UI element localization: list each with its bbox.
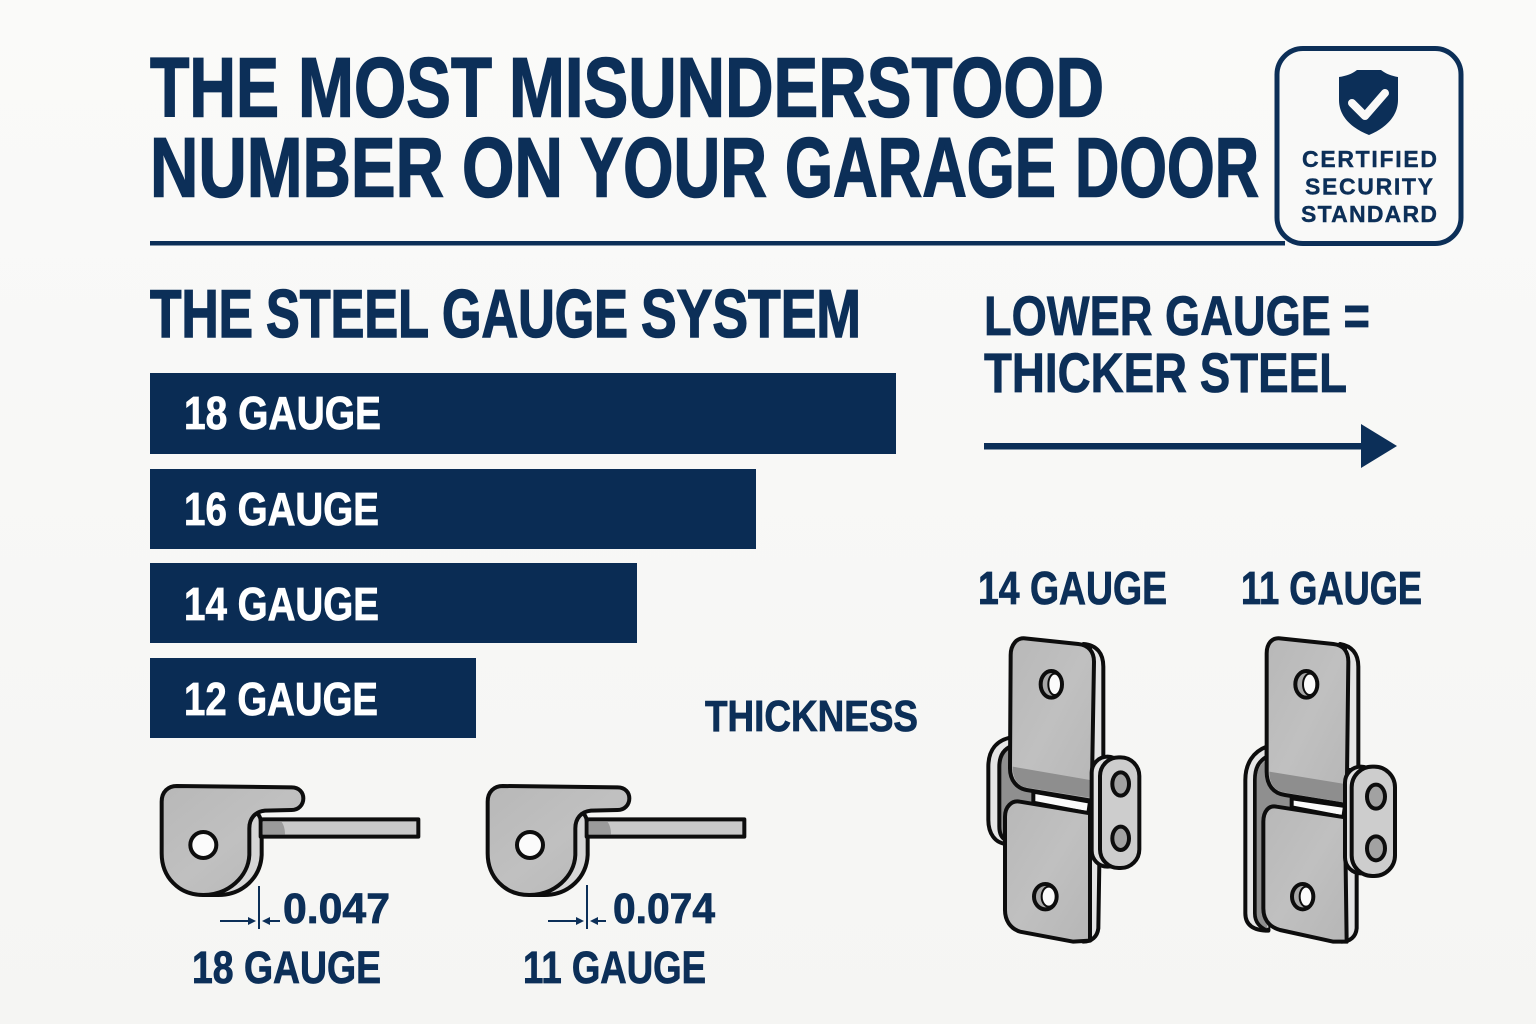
callout: lower gauge equals thicker steel: LOWER GAUGE = bbox=[984, 284, 1370, 347]
dimension: 0.047: 0.047 bbox=[283, 885, 390, 933]
title: YOUR bbox=[580, 120, 767, 214]
dimension: 0.047 bbox=[220, 885, 390, 933]
bar: 12 gauge: 12 GAUGE bbox=[184, 673, 378, 725]
bar: 16 gauge bbox=[150, 469, 756, 549]
badge: certified security standard bbox=[1277, 48, 1461, 244]
heading: the steel gauge system: THE bbox=[150, 276, 253, 352]
label: 11 gauge thickness: 11 GAUGE bbox=[523, 942, 706, 993]
badge text: CERTIFIED bbox=[1302, 146, 1437, 172]
title: NUMBER bbox=[150, 120, 444, 214]
title: MISUNDERSTOOD bbox=[509, 40, 1104, 134]
heading: the steel gauge system bbox=[150, 276, 861, 352]
icon: shield with check bbox=[1339, 70, 1398, 135]
bar: 12 gauge bbox=[150, 658, 476, 738]
title: GARAGE bbox=[785, 120, 1056, 214]
icon: 11 gauge hinge bbox=[1245, 638, 1395, 942]
heading: the steel gauge system: SYSTEM bbox=[641, 276, 861, 352]
title bbox=[150, 40, 1259, 214]
label: 11 gauge hinge: 11 GAUGE bbox=[1241, 562, 1422, 614]
callout: lower gauge equals thicker steel: THICKER STEEL bbox=[984, 341, 1347, 404]
bar: 18 gauge bbox=[150, 373, 896, 454]
badge text bbox=[1301, 146, 1437, 227]
label: 18 gauge thickness: 18 GAUGE bbox=[192, 942, 381, 993]
callout: lower gauge equals thicker steel bbox=[984, 284, 1370, 404]
label: thickness: THICKNESS bbox=[705, 692, 918, 741]
bar chart: steel gauge bars bbox=[150, 373, 896, 738]
bar: 18 gauge: 18 GAUGE bbox=[184, 387, 381, 439]
icon: 14 gauge hinge bbox=[988, 638, 1139, 942]
bar: 14 gauge: 14 GAUGE bbox=[184, 578, 379, 630]
heading: the steel gauge system: STEEL bbox=[266, 276, 429, 352]
arrow: pointing right bbox=[984, 424, 1397, 468]
title: MOST bbox=[298, 40, 492, 134]
bar: 16 gauge: 16 GAUGE bbox=[184, 483, 379, 535]
title: ON bbox=[462, 120, 563, 214]
dimension: 0.074: 0.074 bbox=[613, 885, 715, 933]
dimension: 0.074 bbox=[548, 885, 715, 933]
badge text: SECURITY bbox=[1305, 174, 1433, 200]
title: THE bbox=[150, 40, 279, 134]
label: 14 gauge hinge: 14 GAUGE bbox=[978, 562, 1167, 614]
bar: 14 gauge bbox=[150, 563, 637, 643]
icon: 18 gauge bracket bbox=[162, 786, 418, 895]
badge text: STANDARD bbox=[1301, 201, 1437, 227]
title: DOOR bbox=[1075, 120, 1259, 214]
heading: the steel gauge system: GAUGE bbox=[442, 276, 628, 352]
icon: 11 gauge bracket bbox=[488, 786, 744, 895]
